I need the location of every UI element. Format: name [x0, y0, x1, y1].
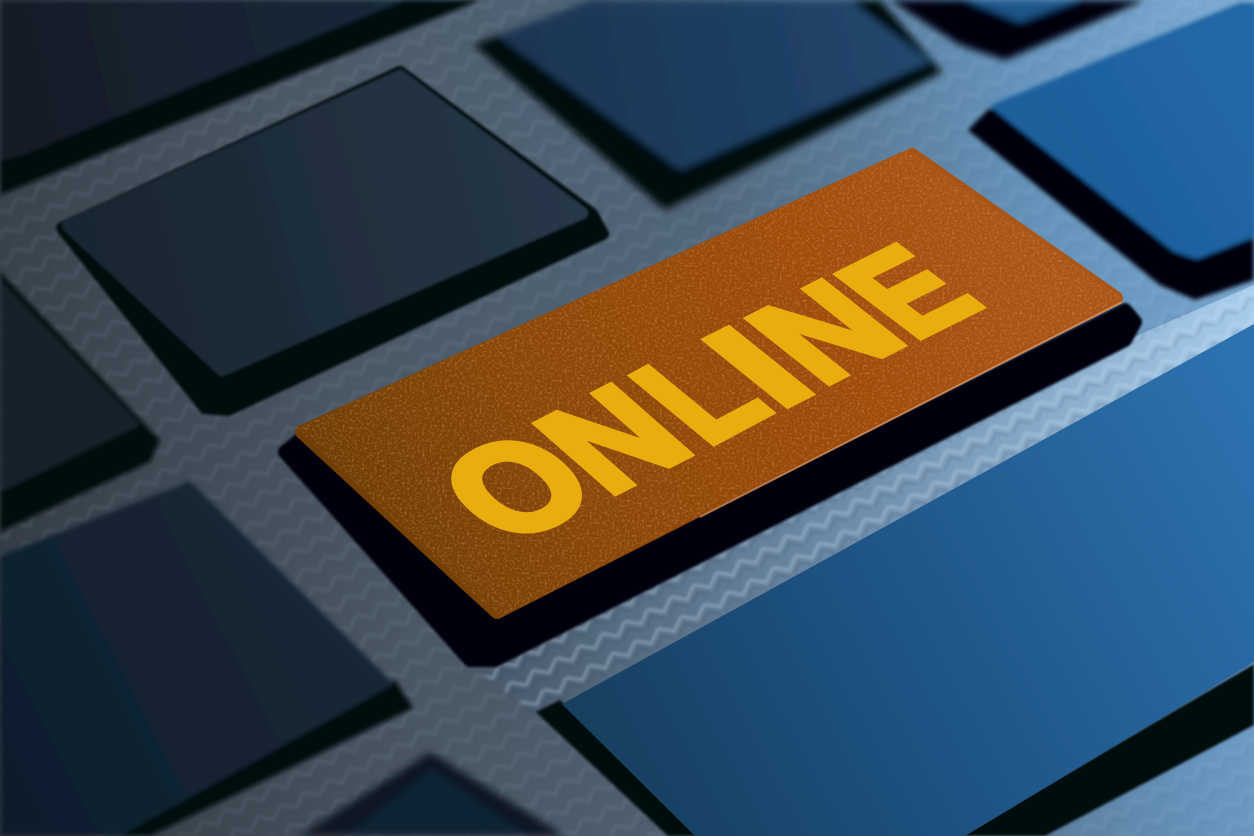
- word: ONLINE: O: [405, 405, 629, 568]
- key: bottom centre: [300, 752, 565, 836]
- key surface: [302, 155, 1116, 612]
- key: right: [968, 5, 1254, 300]
- word: ONLINE: N: [715, 257, 936, 407]
- surface grain: [280, 140, 1140, 630]
- key shadow: [285, 310, 1135, 660]
- orange online key: [280, 140, 1140, 660]
- word: ONLINE: L: [599, 323, 800, 468]
- highlight on key edge: [700, 302, 1122, 517]
- key: top left: [0, 0, 480, 195]
- chevron texture band: [480, 285, 1254, 714]
- key: left middle: [0, 272, 160, 532]
- word: ONLINE: N: [504, 360, 723, 519]
- word: ONLINE: [405, 223, 1012, 568]
- word: ONLINE: E: [805, 223, 1012, 361]
- key: top centre: [474, 0, 942, 210]
- key: bottom left: [0, 481, 413, 836]
- word: ONLINE: I: [671, 303, 845, 430]
- key: centre left: [62, 72, 603, 410]
- key: top right far: [890, 0, 1145, 60]
- key: large bottom right: [536, 324, 1254, 836]
